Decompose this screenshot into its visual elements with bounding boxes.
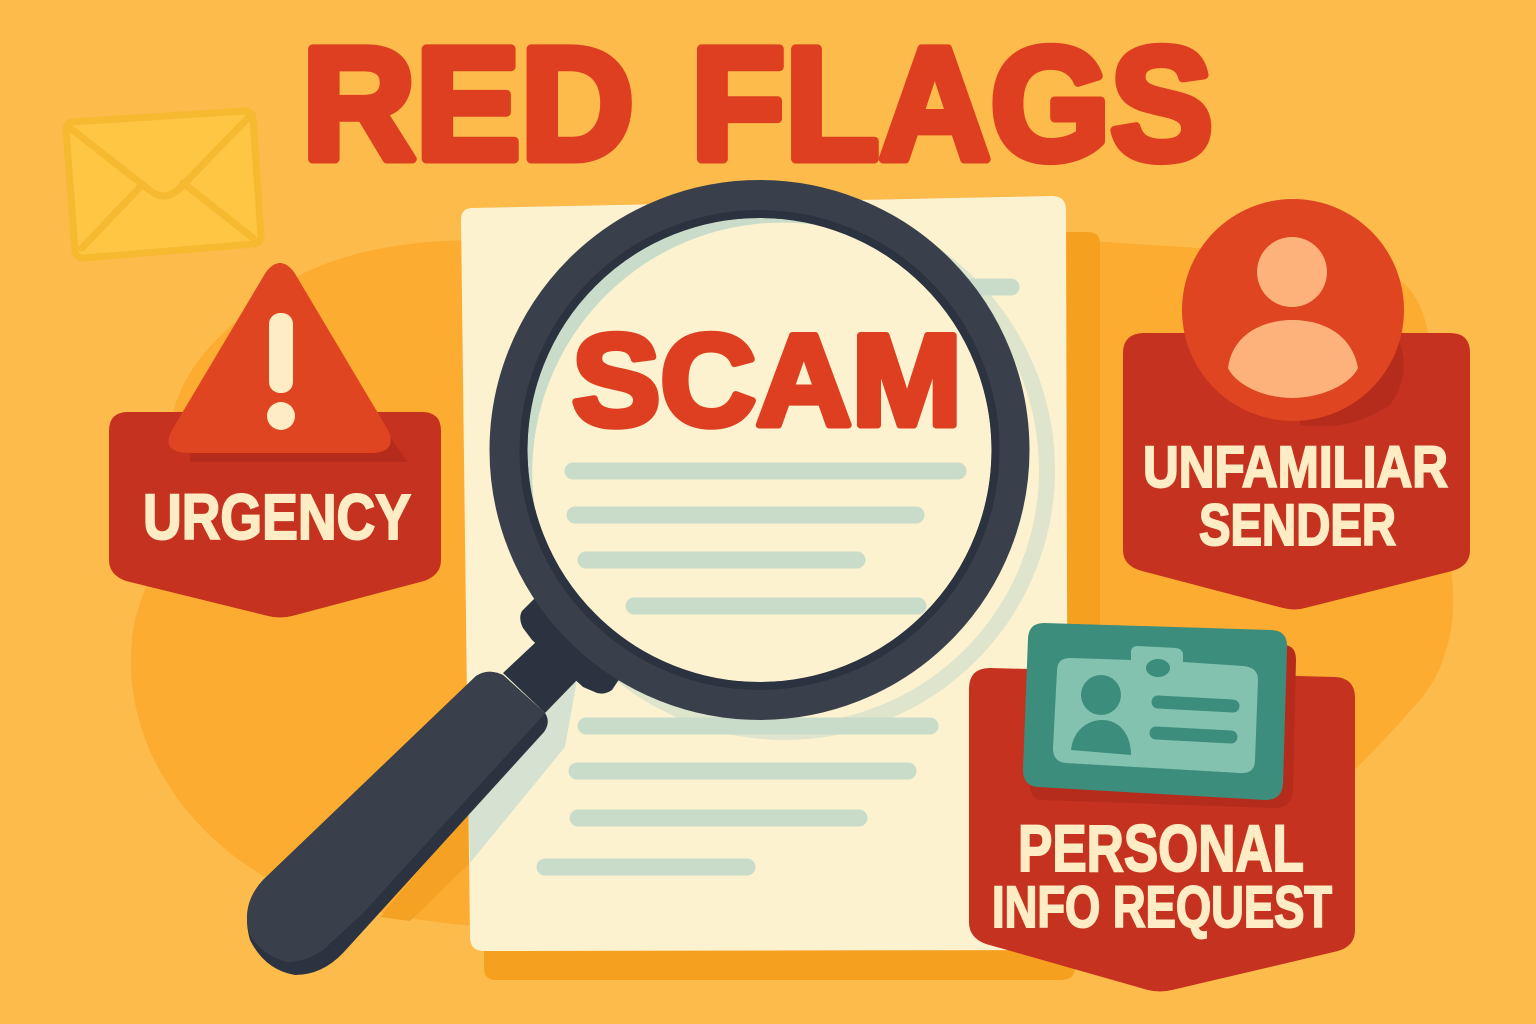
lens lines xyxy=(573,471,958,606)
badge: personal info request: INFO REQUEST xyxy=(992,875,1332,940)
icon: envelope xyxy=(66,111,261,258)
label: PERSONAL xyxy=(1018,811,1304,885)
title: FLAGS xyxy=(691,14,1213,193)
badge: urgency xyxy=(109,263,441,618)
document text lines xyxy=(545,287,1011,867)
handle neck xyxy=(503,642,577,713)
title: RED xyxy=(302,14,634,193)
title xyxy=(302,14,1213,193)
magnifying glass xyxy=(247,199,1047,975)
label: UNFAMILIAR xyxy=(1143,435,1448,500)
document shadow xyxy=(484,232,1100,980)
lens glass xyxy=(522,212,998,688)
scam word: SCAM xyxy=(572,307,962,453)
lens ring xyxy=(508,199,1010,701)
icon: id card xyxy=(1023,623,1287,800)
icon: warning triangle xyxy=(168,263,391,453)
handle collar xyxy=(520,598,620,694)
handle xyxy=(247,672,548,975)
handle shadow on background xyxy=(380,810,470,921)
lens shadow xyxy=(523,208,1047,732)
badge: unfamiliar sender xyxy=(1123,199,1470,610)
badge: unfamiliar sender: SENDER xyxy=(1199,493,1396,558)
label: URGENCY xyxy=(143,481,411,553)
background blob xyxy=(131,240,1453,927)
badge: personal info request xyxy=(969,623,1355,992)
icon: person avatar xyxy=(1182,199,1404,421)
panel: scam document xyxy=(461,196,1068,951)
